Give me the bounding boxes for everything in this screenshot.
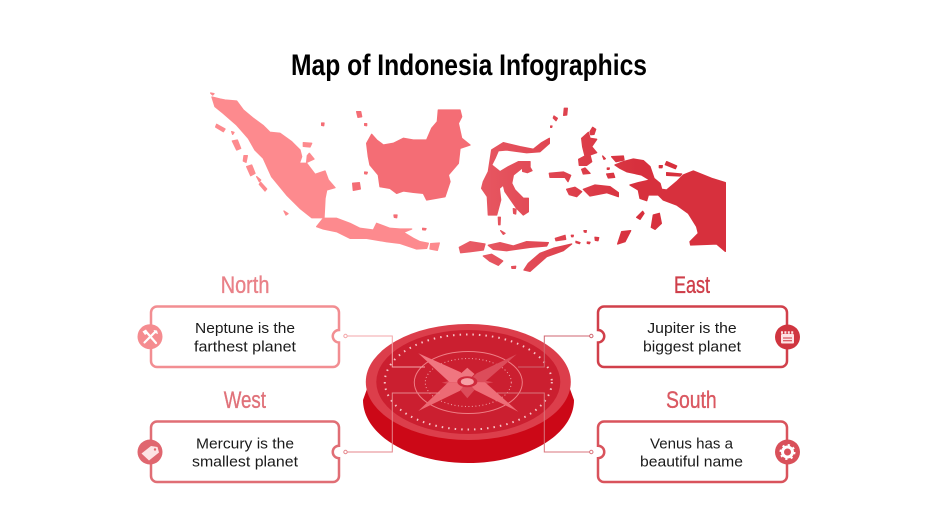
- icon: gear: [775, 440, 800, 464]
- compass: rim: [366, 324, 571, 440]
- icon: tools: [138, 324, 162, 349]
- text: South: [640, 435, 743, 471]
- card: West: [151, 422, 339, 482]
- compass: base: [363, 375, 574, 463]
- text: South: beautiful name: [640, 454, 743, 471]
- card: North: [151, 306, 339, 367]
- panel: West: [138, 387, 339, 482]
- map of Indonesia: [211, 93, 725, 271]
- text: West: smallest planet: [192, 454, 299, 471]
- compass: face: [376, 330, 560, 434]
- text: West: Mercury is the: [196, 435, 294, 452]
- text: East: biggest planet: [643, 339, 742, 356]
- text: East: [643, 320, 742, 356]
- compass: inner dotted ring: [425, 358, 511, 406]
- compass: [363, 324, 574, 463]
- text: North: farthest planet: [194, 339, 297, 356]
- text: East: Jupiter is the: [647, 320, 737, 337]
- text: South: Venus has a: [650, 435, 734, 452]
- map: Sumatra and Java: [211, 93, 439, 250]
- connector: south: [497, 393, 593, 454]
- compass: inner ring: [414, 352, 522, 414]
- card: South: [598, 422, 787, 482]
- heading: West: West: [224, 387, 266, 414]
- heading: East: East: [674, 272, 710, 299]
- icon: tag: [138, 440, 162, 464]
- connector: north: [344, 334, 425, 367]
- compass: star: [418, 353, 518, 412]
- heading: North: North: [221, 272, 269, 299]
- connector: east: [518, 334, 593, 367]
- card: East: [598, 306, 787, 367]
- text: West: [192, 435, 299, 471]
- heading: South: South: [666, 387, 717, 414]
- text: North: [194, 320, 297, 356]
- panel: South: [598, 387, 800, 482]
- map: eastern islands: [459, 108, 725, 271]
- panel: East: [598, 272, 800, 367]
- map: Borneo: [322, 110, 470, 230]
- title: Map of Indonesia Infographics: [291, 49, 647, 82]
- panel: North: [138, 272, 339, 367]
- icon: clapboard: [775, 324, 800, 350]
- compass: dotted ring: [385, 334, 552, 430]
- text: North: Neptune is the: [195, 320, 295, 337]
- connector: west: [344, 393, 440, 454]
